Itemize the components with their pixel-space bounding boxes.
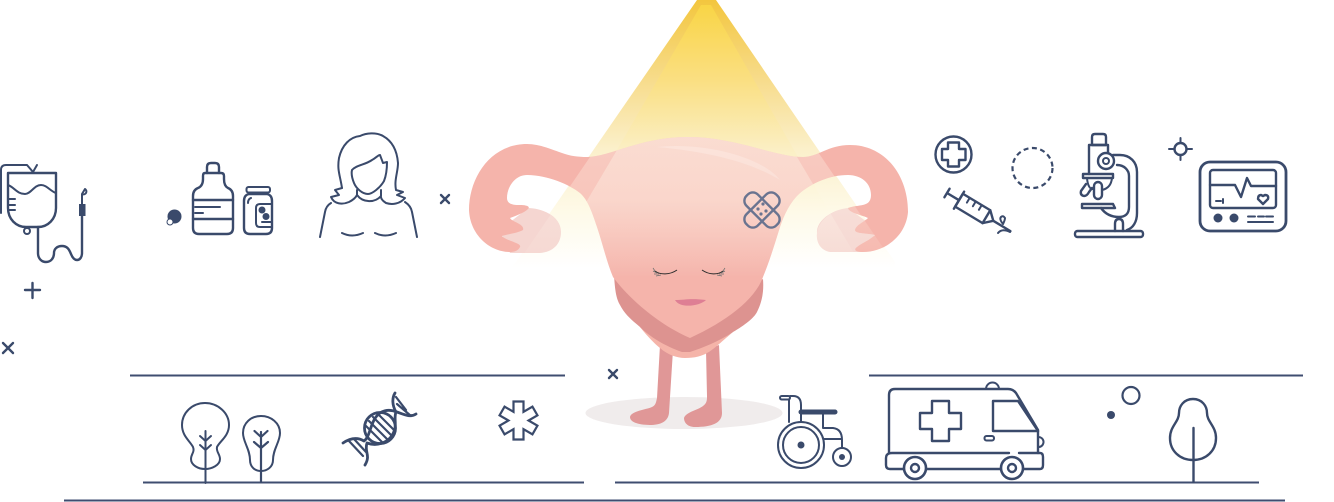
icon: ambulance (886, 383, 1044, 479)
light veil on the uterus (570, 137, 879, 262)
icon: syringe (942, 184, 1016, 240)
icon: heart monitor (1200, 162, 1286, 231)
icon: medicine ball dot (167, 210, 182, 225)
icon: pill jar (244, 187, 272, 234)
icon: DNA helix (343, 393, 416, 465)
icon: medical cross circle (936, 136, 972, 172)
lower lip fold (640, 320, 733, 358)
icon: medicine bottle (193, 163, 233, 234)
small tree (243, 416, 280, 471)
left eye (655, 270, 677, 274)
icon: tree right (1170, 399, 1216, 482)
tube tips pale (500, 208, 878, 253)
face (653, 268, 725, 306)
icon: IV drip bag (1, 165, 86, 262)
syringe drop (998, 216, 1010, 233)
icon: crosshair (1169, 138, 1192, 160)
uterus and tubes silhouette (469, 137, 908, 338)
uterus character (469, 130, 908, 358)
leg: right (684, 345, 722, 427)
ground shadow (586, 397, 782, 429)
legs (630, 345, 722, 427)
right eye (702, 270, 723, 274)
icon: microscope (1075, 134, 1143, 237)
mark: plus (25, 283, 40, 298)
dark fold (614, 275, 763, 352)
icon: dashed circle (1012, 148, 1052, 188)
bubbles (1107, 387, 1140, 419)
leg: left (630, 345, 673, 425)
lips (675, 299, 706, 306)
mark: cross near leg (609, 370, 617, 378)
mark: cross near woman (441, 195, 449, 203)
icon: woman bust (320, 133, 417, 237)
icon: bandage (741, 189, 783, 231)
spotlight cone (510, 0, 895, 268)
icon: trees left (182, 403, 280, 483)
icon: wheelchair (778, 396, 851, 468)
icon: star of life (500, 402, 537, 440)
big tree (182, 403, 229, 469)
divider lines (64, 376, 1303, 500)
mark: cross left (3, 343, 13, 353)
